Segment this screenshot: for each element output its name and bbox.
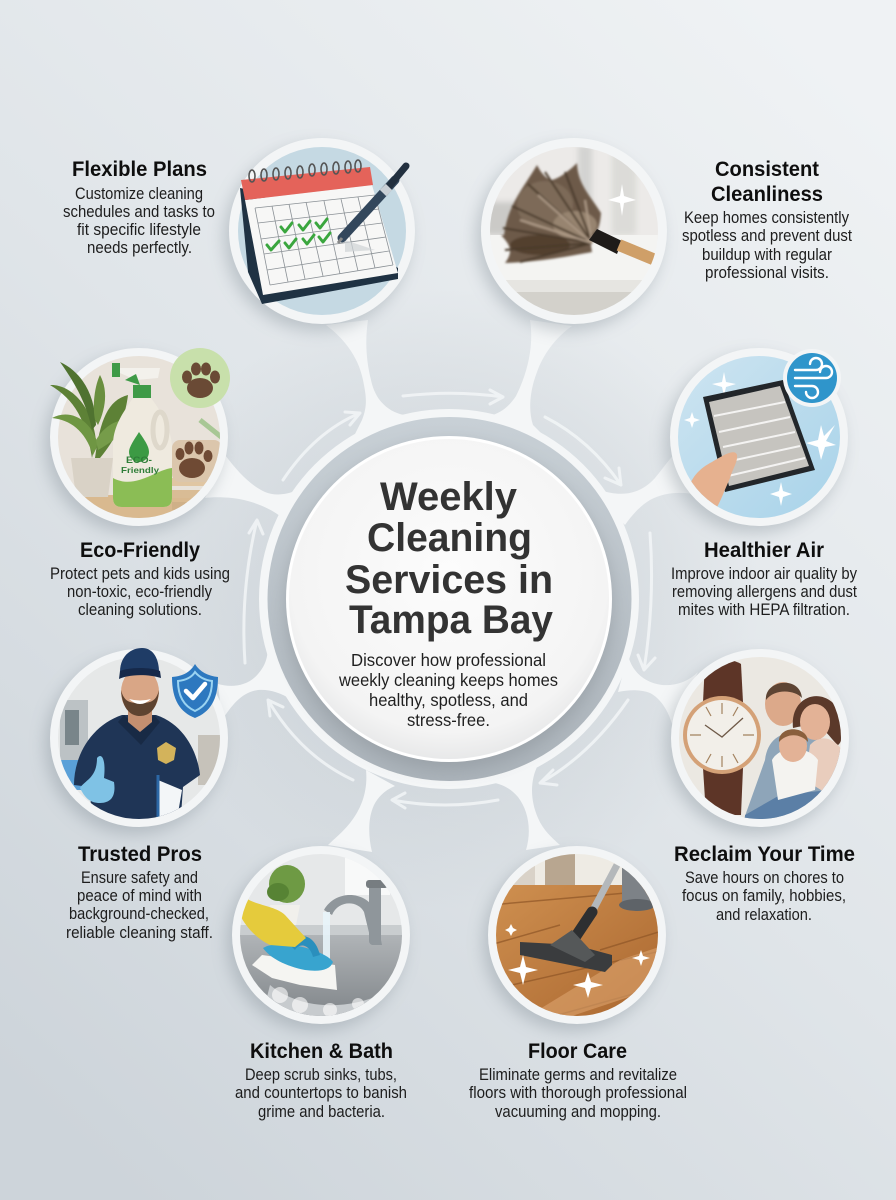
text: consistent cleanliness: professional visits. bbox=[705, 264, 829, 282]
panel: kitchen and bath bbox=[227, 846, 410, 1121]
panel: trusted pros bbox=[45, 648, 230, 942]
text: trusted pros: peace of mind with bbox=[77, 887, 202, 905]
text: reclaim your time: and relaxation. bbox=[716, 906, 812, 924]
text: eco-friendly bbox=[50, 538, 230, 619]
text: trusted pros: reliable cleaning staff. bbox=[66, 924, 213, 942]
text: consistent cleanliness: Cleanliness bbox=[711, 182, 823, 206]
hub description bbox=[338, 650, 558, 730]
text: flexible plans: Flexible Plans bbox=[72, 157, 207, 181]
cycle arrows around the hub bbox=[244, 390, 655, 808]
text: healthier air bbox=[671, 538, 858, 619]
text: trusted pros: Ensure safety and bbox=[81, 869, 198, 887]
text: floor care: floors with thorough professional bbox=[469, 1084, 687, 1102]
text: floor care: Eliminate germs and revitalize bbox=[479, 1066, 677, 1084]
text: floor care: Floor Care bbox=[528, 1039, 627, 1063]
panel: floor care bbox=[469, 846, 687, 1121]
icon: eco bottle, plant and paws: Friendly bbox=[121, 465, 159, 475]
hub title: Tampa Bay bbox=[349, 598, 554, 642]
text: kitchen and bath: and countertops to banish bbox=[235, 1084, 407, 1102]
hub description: stress-free. bbox=[407, 710, 490, 730]
icon: uniformed cleaner with shield bbox=[58, 648, 220, 819]
text: reclaim your time: Reclaim Your Time bbox=[674, 842, 855, 866]
text: reclaim your time: focus on family, hobbies, bbox=[682, 887, 846, 905]
hub title: Cleaning bbox=[367, 516, 532, 560]
text: eco-friendly: non-toxic, eco-friendly bbox=[67, 583, 213, 601]
icon: gloved hand scrubbing sink bbox=[240, 854, 402, 1016]
hub description: Discover how professional bbox=[351, 650, 546, 670]
connector network linking hub to the eight benefits bbox=[205, 320, 705, 852]
text: eco-friendly: Protect pets and kids using bbox=[50, 565, 230, 583]
text: healthier air: mites with HEPA filtration. bbox=[678, 601, 850, 619]
text: consistent cleanliness: Keep homes consistently bbox=[684, 209, 850, 227]
panel: eco-friendly bbox=[45, 348, 230, 619]
text: consistent cleanliness: spotless and prevent dust bbox=[682, 227, 852, 245]
text: trusted pros bbox=[66, 842, 213, 942]
text: consistent cleanliness: Consistent bbox=[715, 157, 819, 181]
central hub bbox=[268, 417, 632, 781]
icon: HEPA filter and wind badge bbox=[678, 349, 841, 518]
hub title bbox=[345, 475, 554, 642]
icon: vacuum on wood floor bbox=[496, 854, 658, 1016]
text: reclaim your time bbox=[674, 842, 855, 924]
text: flexible plans: schedules and tasks to bbox=[63, 203, 215, 221]
text: flexible plans: fit specific lifestyle bbox=[77, 221, 201, 239]
text: trusted pros: Trusted Pros bbox=[78, 842, 202, 866]
text: flexible plans bbox=[63, 157, 215, 257]
icon: calendar with pen bbox=[238, 147, 410, 315]
text: eco-friendly: cleaning solutions. bbox=[78, 601, 202, 619]
text: healthier air: Healthier Air bbox=[704, 538, 825, 562]
icon: feather duster bbox=[490, 147, 658, 315]
hub title: Weekly bbox=[380, 475, 518, 519]
text: consistent cleanliness: buildup with regular bbox=[702, 246, 832, 264]
text: eco-friendly: Eco-Friendly bbox=[80, 538, 200, 562]
panel: consistent cleanliness bbox=[476, 138, 852, 331]
icon: eco bottle, plant and paws: ECO- bbox=[126, 455, 152, 466]
text: consistent cleanliness bbox=[682, 157, 852, 282]
icon: wristwatch and family bbox=[679, 657, 841, 819]
text: kitchen and bath: grime and bacteria. bbox=[258, 1103, 385, 1121]
hub description: healthy, spotless, and bbox=[369, 690, 528, 710]
text: trusted pros: background-checked, bbox=[69, 905, 209, 923]
text: floor care bbox=[469, 1039, 687, 1121]
text: kitchen and bath bbox=[235, 1039, 407, 1121]
panel: reclaim your time bbox=[666, 649, 855, 924]
text: flexible plans: Customize cleaning bbox=[75, 185, 203, 203]
text: reclaim your time: Save hours on chores to bbox=[685, 869, 844, 887]
text: kitchen and bath: Deep scrub sinks, tubs, bbox=[245, 1066, 397, 1084]
text: flexible plans: needs perfectly. bbox=[87, 239, 192, 257]
text: healthier air: Improve indoor air quality by bbox=[671, 565, 858, 583]
text: healthier air: removing allergens and dust bbox=[672, 583, 857, 601]
panel: healthier air bbox=[665, 348, 858, 619]
text: kitchen and bath: Kitchen & Bath bbox=[250, 1039, 393, 1063]
hub description: weekly cleaning keeps homes bbox=[338, 670, 558, 690]
hub title: Services in bbox=[345, 558, 553, 602]
text: floor care: vacuuming and mopping. bbox=[495, 1103, 661, 1121]
icon: eco bottle, plant and paws bbox=[50, 348, 230, 525]
panel: flexible plans bbox=[63, 138, 420, 331]
